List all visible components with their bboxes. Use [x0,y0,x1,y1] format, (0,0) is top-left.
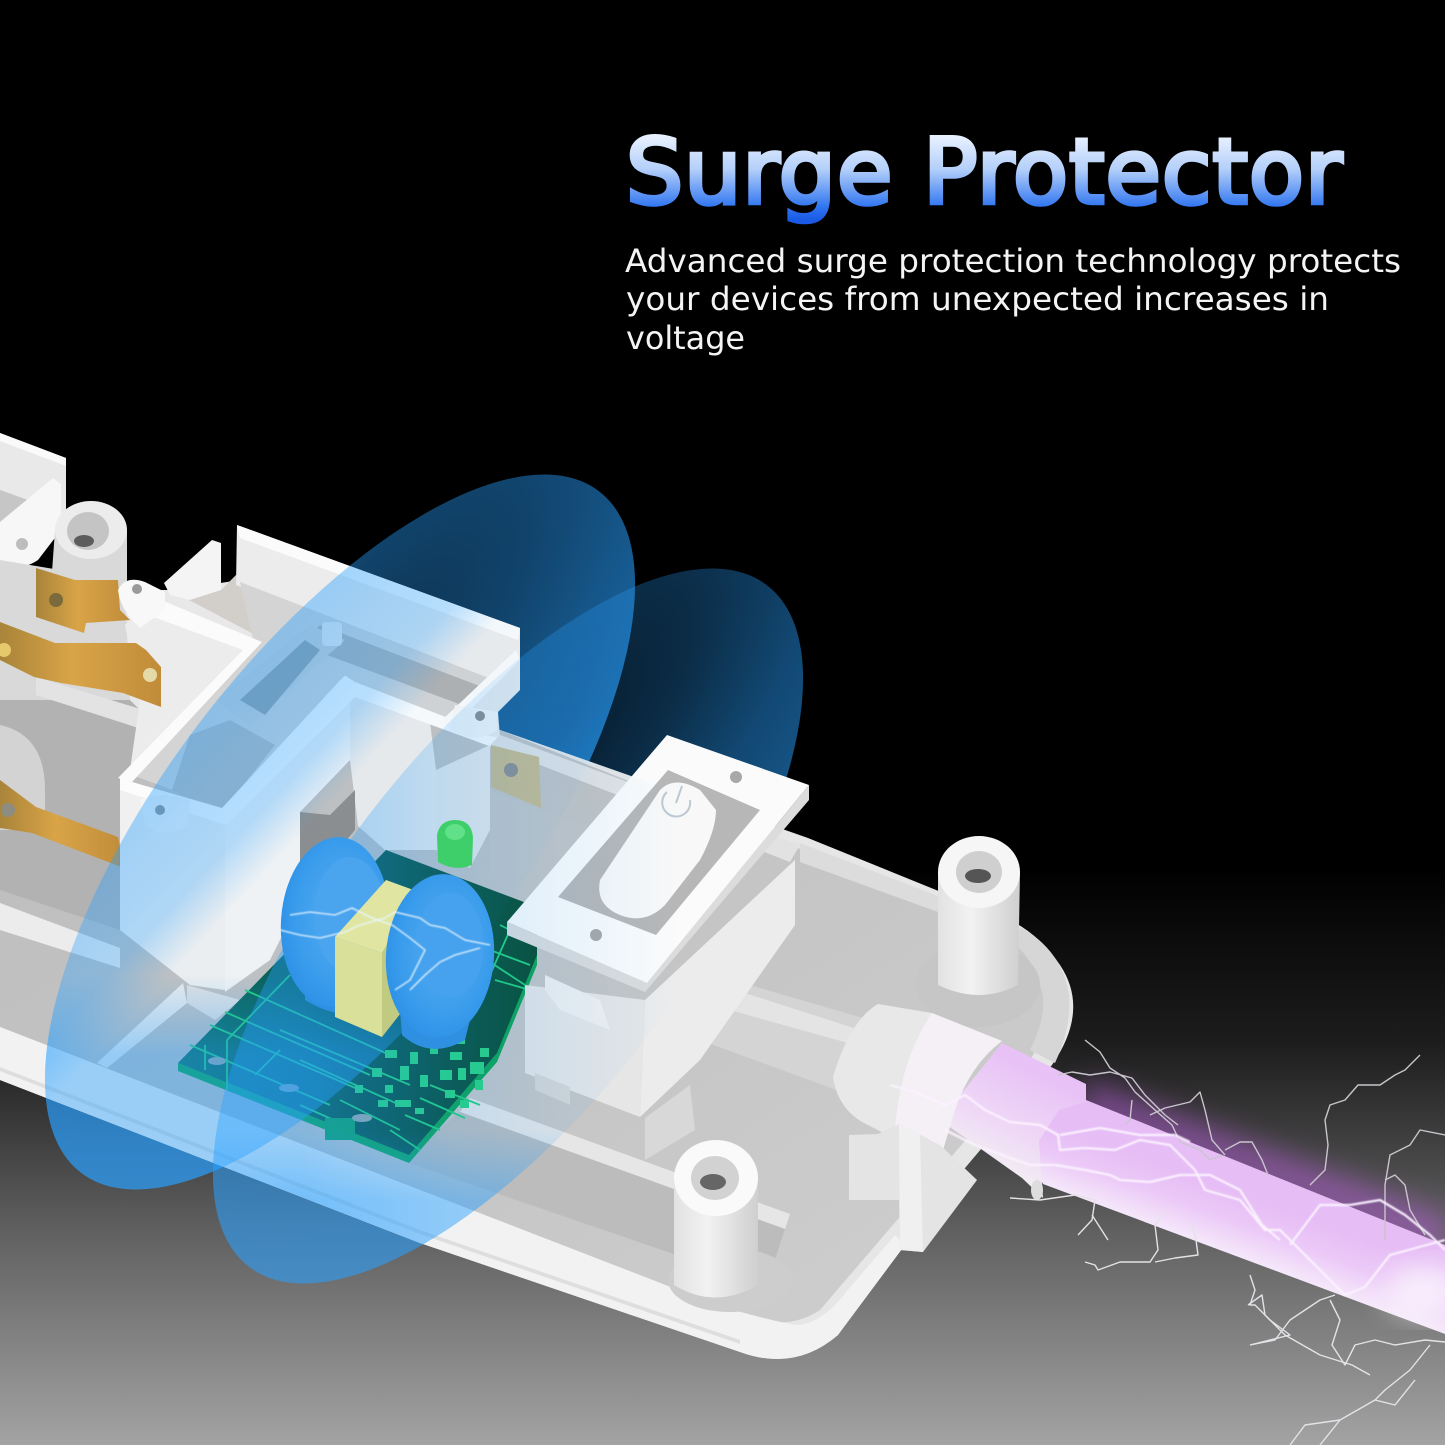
switch frame edge [507,785,809,992]
board solder pads [325,1035,489,1140]
inner ledge right [460,1098,790,1229]
cable clip [849,1124,977,1252]
internal tube [700,975,870,1095]
components on the board [275,820,500,1049]
right wall strip [440,650,520,728]
circuit board [178,850,540,1163]
capacitor lightning [280,908,490,990]
screw lobe top left [118,580,165,628]
slide switch detail [215,625,345,725]
power icon [662,786,690,817]
cable purple glow [1085,1080,1445,1260]
board edge [178,950,537,1163]
back wall [236,525,520,690]
LED [437,820,473,868]
blue shield tint over device [44,566,628,1244]
pale bracket [36,677,160,735]
switch latch [545,975,610,1030]
blue shield ellipse back [107,477,909,1375]
rocker switch [507,735,809,1160]
power strip housing [0,560,1073,1359]
right capacitor [380,870,500,1049]
rocker button [599,782,716,918]
L wall face [125,612,245,770]
inner rail and screw lobe [0,478,61,568]
switch body [525,985,645,1117]
board surface [178,850,537,1155]
inner floor [0,640,1052,1322]
lower screw post [0,725,45,830]
wall behind contacts [0,560,130,700]
screw post left [668,1140,792,1312]
lobes with screw holes [140,795,190,832]
box front face [120,778,225,990]
brass contact 2 [0,622,161,707]
yellow component [335,880,419,1037]
right wall step [440,650,520,738]
description text: your devices from unexpected increases in [626,280,1329,318]
box interior [132,582,520,808]
title: Surge Protector [626,120,1342,225]
strain relief collar [833,1004,1002,1160]
back wall top left [0,433,66,540]
cable body [1000,1100,1445,1334]
screw post [50,530,127,650]
screw post right [916,836,1040,1027]
front rim band [0,1027,905,1359]
grey bolts [1058,1040,1445,1240]
description text: voltage [626,319,745,357]
cable assembly [833,1004,1445,1334]
frame screw holes [590,929,602,941]
L-shaped top rim [118,600,262,782]
switch feet [535,1073,570,1105]
blue shield ellipse front [0,383,741,1281]
left wing wall [164,540,221,600]
left capacitor [275,833,395,1014]
L wall backing [125,580,262,740]
outer shell rim [0,560,1073,1359]
brass contact 1 [36,568,130,633]
bright bolts on cable [890,1085,1445,1295]
socket floor [0,640,165,930]
description text: Advanced surge protection technology protects [625,242,1401,280]
box top edge [120,675,500,825]
rounded end interior [700,975,870,1095]
bright glow at right [1385,1265,1445,1315]
inner ledge left [0,903,120,968]
board mounting holes [208,1057,372,1122]
board traces [190,925,540,1150]
right pillar [436,745,490,868]
switch frame [507,735,809,983]
brass contact 3 [0,780,124,868]
box right face [225,690,360,992]
switch window [558,770,760,935]
floor right of tab [490,790,655,910]
brass tab [491,745,541,808]
lightning bolts [890,1040,1445,1445]
compartment behind L wall [170,575,320,640]
sockets section [0,433,262,930]
cable neck [940,1043,1086,1198]
top wall of rounded end [800,843,938,912]
description text [625,242,1401,357]
central divider box [118,525,800,992]
